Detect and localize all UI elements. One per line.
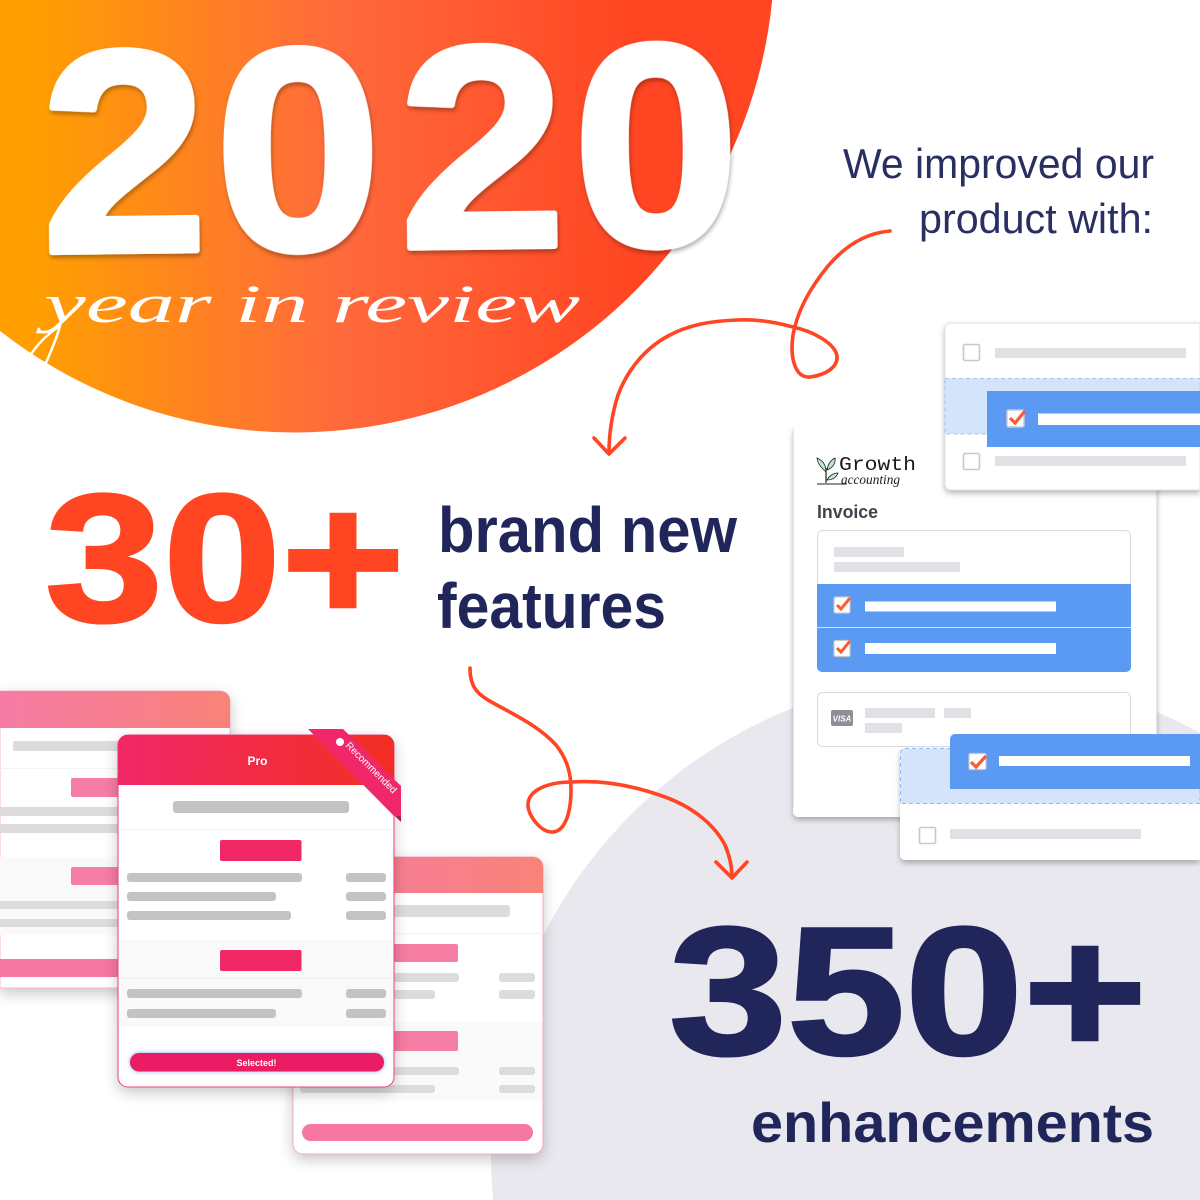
- intro text: we improved our product with: [843, 140, 1154, 242]
- selected blue row: [987, 391, 1200, 447]
- plan rows: [119, 801, 393, 1027]
- stat label: enhancements: enhancements: [751, 1091, 1154, 1154]
- dashed drop zone: [900, 748, 1200, 804]
- checklist row 1: [964, 344, 1186, 360]
- panel: pricing card pro (front): [118, 729, 401, 1087]
- payment method box: VISA: [833, 714, 852, 724]
- arrow: from product text to 30+ features: [594, 231, 890, 454]
- icon: plant logo: [817, 458, 847, 484]
- checklist row 3: [964, 454, 1186, 470]
- intro text: we improved our product with: We improved our: [843, 140, 1154, 187]
- card header: [0, 691, 230, 728]
- bars: [293, 905, 543, 1141]
- ribbon: recommended: [308, 729, 401, 822]
- logo text: growth accounting: accounting: [841, 473, 900, 488]
- heading: invoice: Invoice: [817, 501, 878, 522]
- selected blue row: [950, 734, 1200, 789]
- stat label: brand new features: features: [437, 570, 666, 642]
- panel: checklist card top right: [945, 323, 1200, 490]
- label: pro: Pro: [247, 754, 268, 768]
- payment method box: [818, 692, 1130, 746]
- intro text: we improved our product with: product with:: [919, 195, 1153, 242]
- stat label: brand new features: [437, 494, 737, 642]
- stat label: brand new features: brand new: [438, 494, 737, 566]
- invoice items box: [817, 530, 1131, 672]
- checklist row: [920, 828, 1141, 844]
- logo text: growth accounting: Growth: [839, 454, 916, 476]
- arrow: from features to 350+ enhancements: [470, 668, 747, 878]
- bars: [0, 741, 230, 977]
- stat: 350+: 350+: [669, 889, 1147, 1093]
- dashed drop zone: [945, 378, 1200, 434]
- subtitle: year in review: year in review: [35, 274, 580, 334]
- stat: 30+: 30+: [45, 456, 405, 660]
- background circle: grey: [491, 674, 1200, 1200]
- subtitle: year in review: [30, 274, 580, 367]
- panel: invoice card: [793, 420, 1157, 817]
- card header: [118, 735, 394, 785]
- button: selected: Selected!: [236, 1058, 277, 1068]
- background circle: orange gradient: [0, 0, 772, 432]
- panel: checklist card bottom right: [900, 734, 1200, 860]
- panel: pricing card right (back): [293, 857, 543, 1154]
- logo text: growth accounting: [839, 454, 916, 488]
- button: selected: [130, 1053, 384, 1072]
- ribbon: recommended: Recommended: [343, 740, 399, 796]
- panel: pricing card left (back): [0, 691, 230, 988]
- card header: [293, 857, 543, 893]
